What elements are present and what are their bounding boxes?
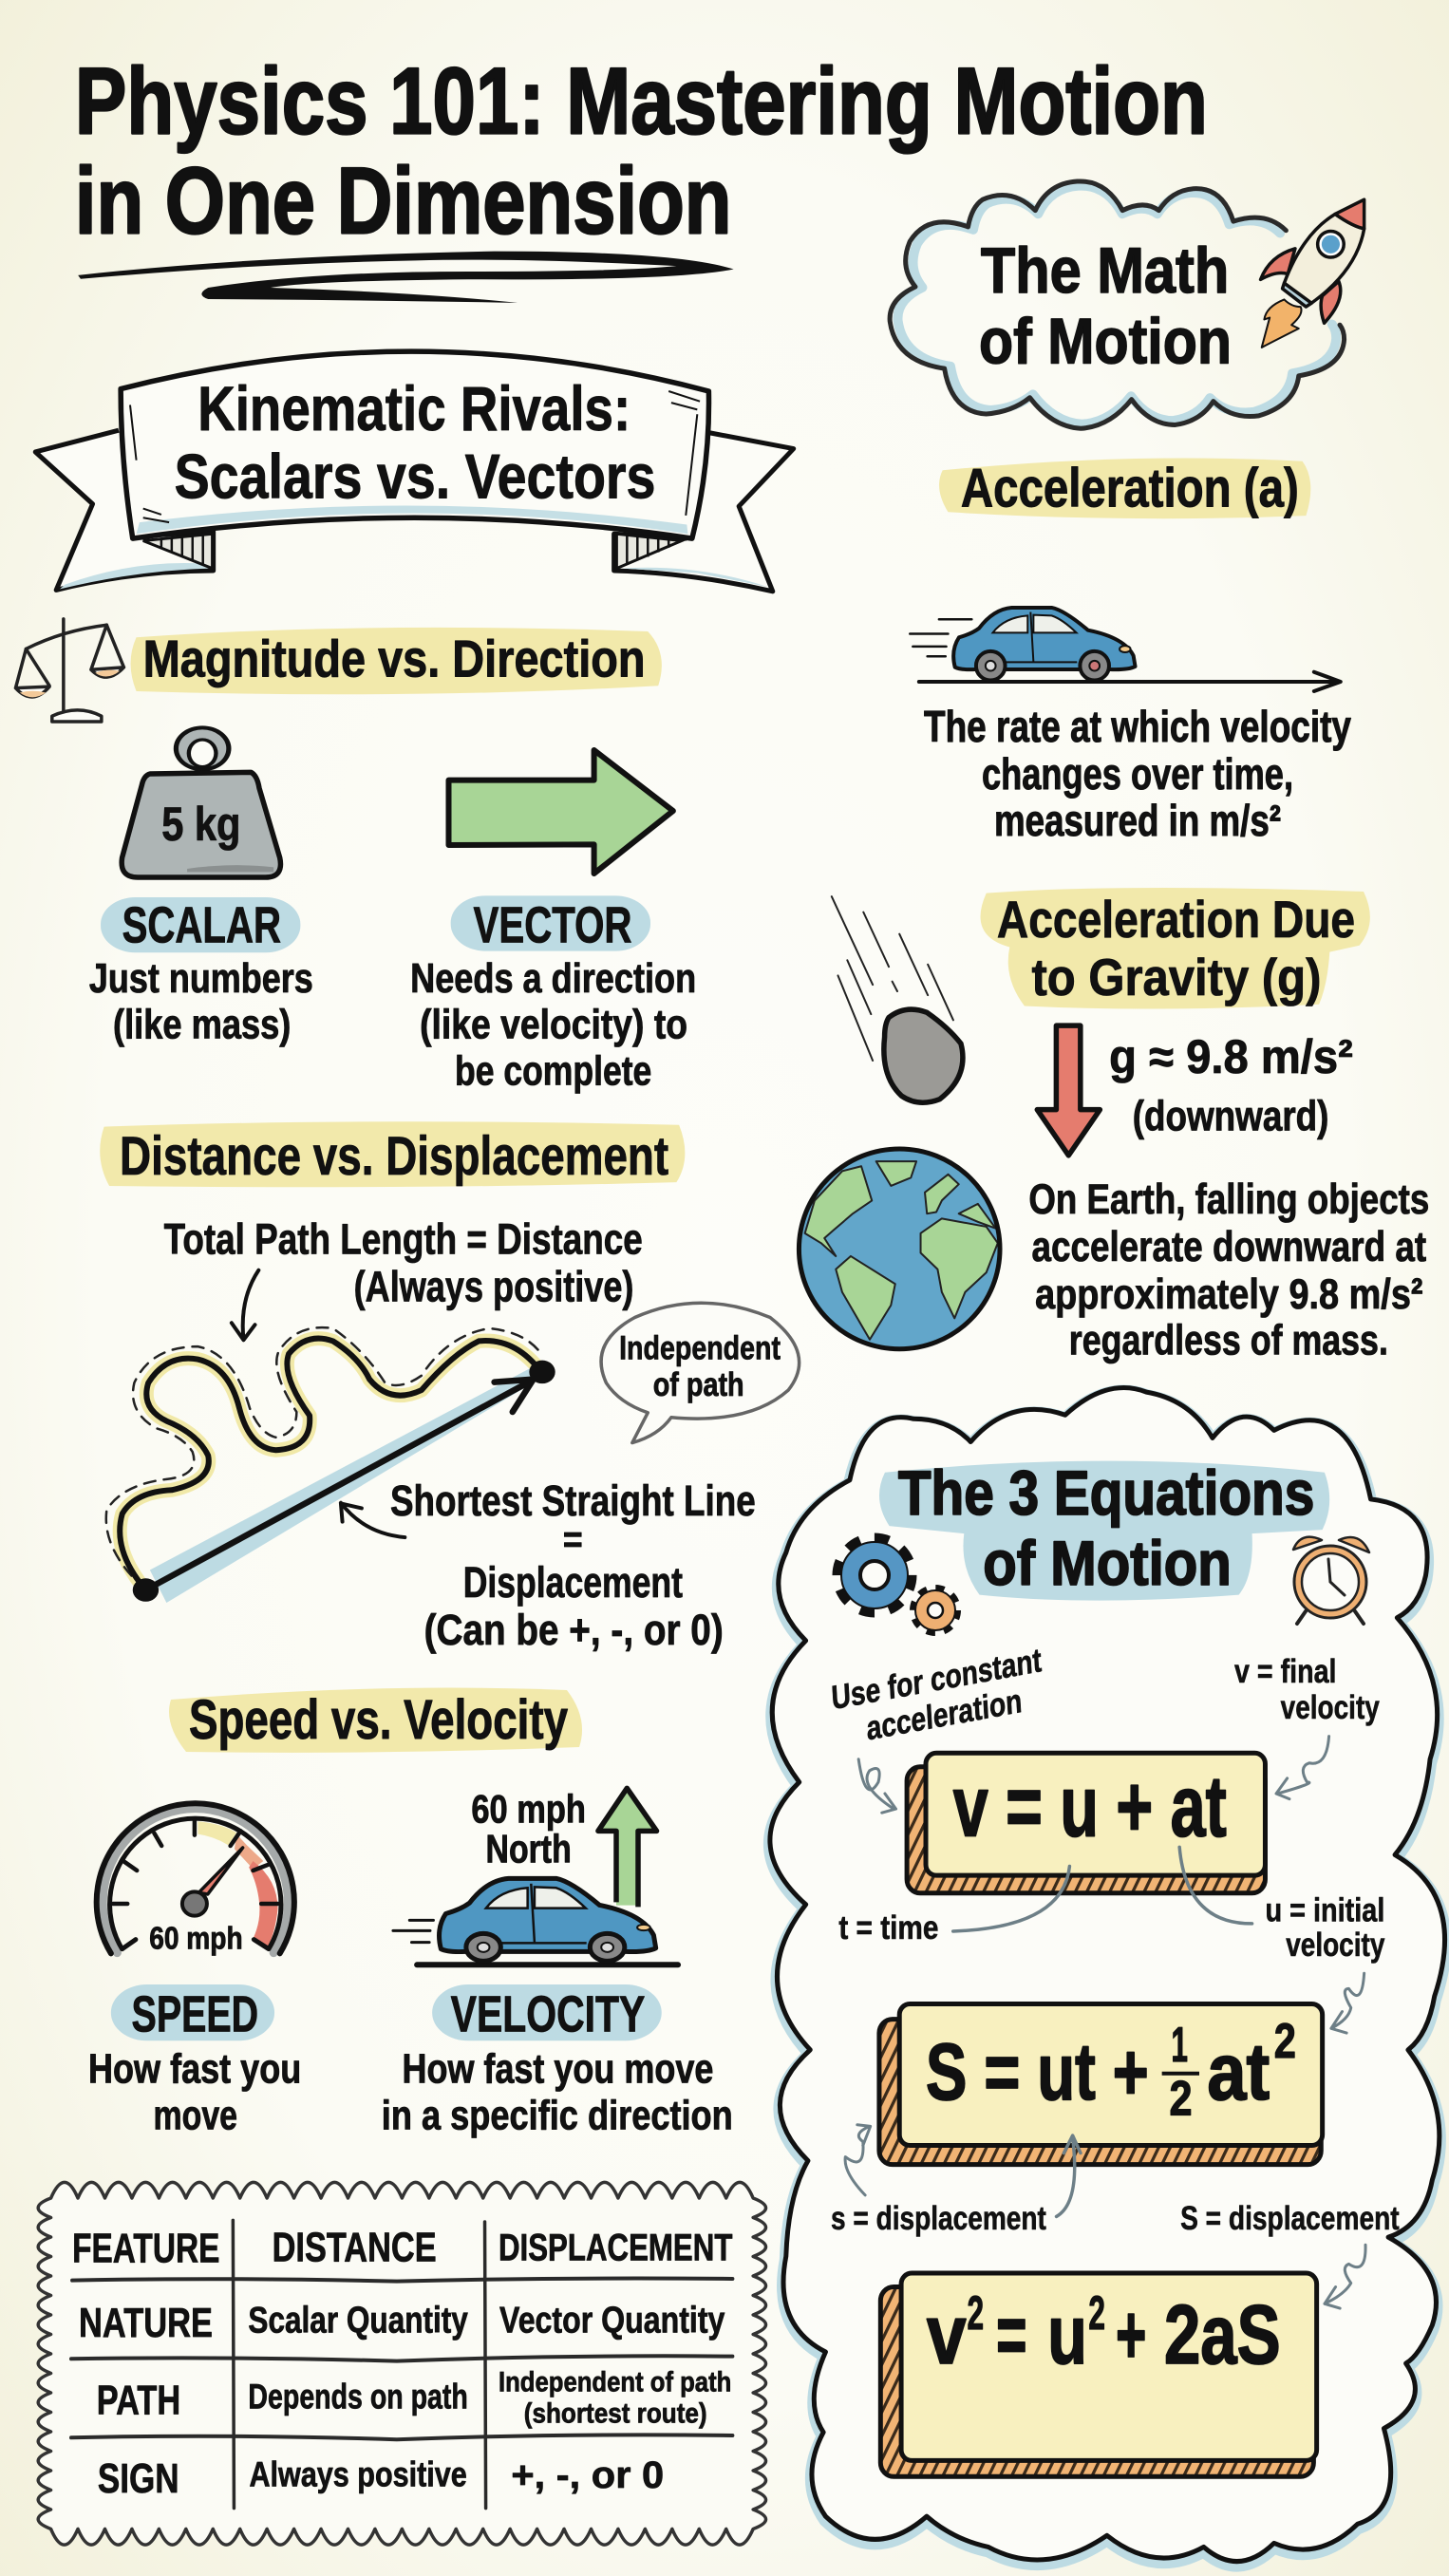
- acceleration description: changes over time,: [982, 749, 1293, 799]
- table header row: FEATURE: [72, 2227, 219, 2271]
- vector description: (like velocity) to: [420, 1001, 687, 1047]
- icon: earth globe: [799, 1149, 1000, 1349]
- heading highlight: [879, 1461, 1329, 1601]
- table row: nature: [79, 2300, 724, 2346]
- velocity description: in a specific direction: [382, 2092, 733, 2138]
- equation 2: S = ut + 1/2 at^2: 2: [1170, 2071, 1193, 2125]
- panel: distance vs displacement: [100, 1121, 800, 1654]
- heading highlight: Acceleration (a): [939, 459, 1310, 518]
- right ribbon tail: [614, 433, 794, 592]
- speed description: move: [154, 2092, 237, 2138]
- equation 2: S = ut + 1/2 at^2: S = ut +: [926, 2027, 1149, 2117]
- panel: the math of motion header: [890, 181, 1364, 691]
- equation 3: v^2 = u^2 + 2aS: [880, 2273, 1317, 2476]
- equation 3: v^2 = u^2 + 2aS: v: [927, 2289, 967, 2382]
- icon: accelerating car with arrow: [910, 608, 1341, 691]
- icon: balance scales: [15, 619, 123, 722]
- gravity value: (downward): [1133, 1092, 1328, 1139]
- distance label: (Always positive): [354, 1263, 633, 1310]
- banner: Kinematic Rivals: [35, 351, 794, 592]
- table header row: DISTANCE: [273, 2226, 437, 2270]
- title: in One Dimension: [75, 149, 731, 254]
- displacement label: =: [563, 1517, 583, 1560]
- equation 1: v = u + at: [907, 1753, 1265, 1893]
- banner face: [121, 351, 709, 538]
- acceleration description: measured in m/s²: [994, 796, 1281, 845]
- banner: Kinematic Rivals: Scalars vs. Vectors: [175, 441, 655, 511]
- note: u = initial velocity: u = initial: [1265, 1892, 1384, 1929]
- vector description: be complete: [455, 1047, 651, 1094]
- displacement label: [390, 1477, 756, 1654]
- scalar label: [101, 897, 300, 954]
- note: u = initial velocity: velocity: [1286, 1927, 1384, 1964]
- connector curves from equation 1: [953, 1847, 1252, 1931]
- 60 mph north label: North: [486, 1828, 572, 1871]
- velocity description: How fast you move: [402, 2045, 713, 2092]
- wavy table border: [38, 2182, 766, 2545]
- scalar label: SCALAR: [122, 897, 281, 954]
- icon: alarm clock: [1293, 1537, 1369, 1624]
- displacement label: (Can be +, -, or 0): [424, 1606, 724, 1654]
- icon: blue car with motion lines: [393, 1878, 656, 1961]
- arrow to path: [232, 1270, 258, 1340]
- equation 3: v^2 = u^2 + 2aS: 2: [1088, 2285, 1105, 2340]
- cloud heading text: [979, 235, 1232, 377]
- note: u = initial velocity: [1265, 1892, 1384, 1964]
- note: S = displacement: S = displacement: [1180, 2200, 1400, 2238]
- title underline stroke: [78, 252, 734, 303]
- speed label: SPEED: [132, 1986, 258, 2042]
- table row: path: [97, 2366, 731, 2429]
- panel: speed vs velocity: [88, 1787, 733, 2138]
- note: v = final velocity: v = final: [1234, 1654, 1336, 1691]
- table row: nature: Vector Quantity: [499, 2300, 724, 2341]
- left ribbon tail: [35, 430, 214, 590]
- icon: 5 kg weight: [122, 725, 280, 877]
- acceleration description: [924, 702, 1351, 845]
- note: v = final velocity: velocity: [1281, 1689, 1380, 1727]
- icon: north arrow: [598, 1788, 657, 1907]
- scalar description: Just numbers: [89, 954, 313, 1001]
- table row: nature: NATURE: [79, 2301, 213, 2346]
- heading: The 3 Equations of Motion: The 3 Equations: [898, 1458, 1314, 1529]
- icon: speedometer: [97, 1803, 294, 1956]
- vector description: Needs a direction: [410, 954, 696, 1001]
- note: s = displacement: s = displacement: [831, 2200, 1046, 2238]
- icon: speedometer: 60 mph: [149, 1921, 243, 1956]
- cloud heading text: of Motion: [979, 305, 1232, 377]
- displacement label: Displacement: [463, 1559, 683, 1607]
- equation 3: v^2 = u^2 + 2aS: 2: [968, 2285, 984, 2340]
- table row: sign: [98, 2454, 664, 2502]
- scalar description: [89, 954, 313, 1047]
- heading: Distance vs. Displacement: Distance vs. Displacement: [120, 1126, 668, 1187]
- icon: green vector arrow: [448, 750, 673, 874]
- connector: s = displacement to equation 2: [1057, 2135, 1081, 2216]
- distance label: [164, 1215, 643, 1310]
- table row: path: PATH: [97, 2379, 180, 2423]
- heading: Acceleration Due to Gravity (g): [997, 890, 1355, 1006]
- speech bubble: independent of path: of path: [653, 1366, 744, 1403]
- note: use for constant acceleration: Use for constant: [831, 1642, 1043, 1718]
- heading: The 3 Equations of Motion: of Motion: [983, 1529, 1232, 1599]
- 60 mph north label: 60 mph: [471, 1787, 586, 1832]
- table row: path: (shortest route): [524, 2397, 707, 2429]
- table row: path: Depends on path: [248, 2379, 468, 2416]
- 60 mph north label: [471, 1787, 586, 1871]
- vector label: [451, 895, 650, 954]
- gravity value: g ≈ 9.8 m/s²: [1109, 1031, 1353, 1083]
- panel: comparison table: DISPLACEMENT: [499, 2228, 733, 2269]
- title: [75, 49, 1208, 254]
- table row: sign: SIGN: [98, 2456, 179, 2502]
- scalar description: (like mass): [113, 1001, 291, 1047]
- equation 3: v^2 = u^2 + 2aS: 2aS: [1164, 2289, 1281, 2382]
- heading highlight: [100, 1121, 685, 1187]
- displacement label: Shortest Straight Line: [390, 1477, 756, 1525]
- table row: path: Independent of path: [499, 2366, 731, 2397]
- icon: falling meteor: [832, 896, 963, 1102]
- gravity value: [1109, 1031, 1353, 1139]
- velocity description: [382, 2045, 733, 2138]
- banner text: Kinematic Rivals:: [198, 373, 630, 443]
- vector description: [410, 954, 696, 1094]
- velocity label: [432, 1984, 662, 2042]
- icon: red gravity arrow: [1037, 1025, 1100, 1156]
- speed description: [88, 2045, 301, 2138]
- note: use for constant acceleration: [831, 1642, 1043, 1748]
- distance label: Total Path Length = Distance: [164, 1215, 643, 1263]
- panel: acceleration due to gravity: [799, 888, 1429, 1363]
- note: v = final velocity: [1234, 1654, 1380, 1727]
- scalloped panel outline: [770, 1388, 1445, 2566]
- vector label: VECTOR: [474, 897, 631, 954]
- equation 2: S = ut + 1/2 at^2: [879, 2004, 1323, 2165]
- speech bubble: independent of path: Independent: [619, 1330, 781, 1367]
- equation 3: v^2 = u^2 + 2aS: u: [1047, 2289, 1087, 2382]
- winding distance path: [106, 1327, 541, 1590]
- icon: rocket: [1261, 199, 1364, 348]
- equation 1: v = u + at: v = u + at: [953, 1758, 1227, 1854]
- table row: sign: Always positive: [249, 2455, 467, 2494]
- equation 3: v^2 = u^2 + 2aS: =: [996, 2289, 1027, 2382]
- displacement arrow: [133, 1361, 555, 1603]
- heading: Magnitude vs. Direction: Magnitude vs. Direction: [143, 631, 646, 688]
- speed description: How fast you: [88, 2045, 301, 2092]
- heading: Acceleration (a): Acceleration (a): [961, 459, 1299, 519]
- note: t = time: t = time: [838, 1909, 938, 1947]
- curly arrows: [845, 1737, 1365, 2308]
- table row: sign: +, -, or 0: [511, 2454, 664, 2496]
- cloud heading text: The Math: [981, 235, 1229, 307]
- note: use for constant acceleration: acceleration: [866, 1683, 1023, 1748]
- equation 3: v^2 = u^2 + 2aS: +: [1116, 2289, 1146, 2382]
- icon: gears: [839, 1540, 956, 1631]
- equation 2: S = ut + 1/2 at^2: 1: [1171, 2017, 1188, 2072]
- speed label: [111, 1984, 274, 2042]
- heading highlight: [981, 888, 1370, 1009]
- table header row: [72, 2226, 733, 2271]
- speech bubble: independent of path: [601, 1303, 800, 1443]
- heading highlight: Speed vs. Velocity: [169, 1688, 582, 1753]
- heading highlight: Magnitude vs. Direction: [131, 628, 662, 694]
- heading: The 3 Equations of Motion: [898, 1458, 1314, 1599]
- panel: scalar vs vector: [89, 725, 696, 1094]
- acceleration description: The rate at which velocity: [924, 702, 1351, 751]
- gravity description: [1028, 1175, 1429, 1363]
- velocity label: VELOCITY: [451, 1986, 645, 2042]
- equation 2: S = ut + 1/2 at^2: 2: [1274, 2013, 1296, 2068]
- arrow to displacement: [341, 1503, 405, 1537]
- table row: nature: Scalar Quantity: [248, 2300, 468, 2341]
- heading: Acceleration Due to Gravity (g): to Gravity (g): [1032, 948, 1321, 1006]
- panel: the 3 equations of motion: [770, 1388, 1445, 2566]
- icon: 5 kg weight: 5 kg: [161, 798, 240, 851]
- heading: Speed vs. Velocity: Speed vs. Velocity: [189, 1689, 568, 1751]
- ground line: [417, 1962, 678, 1967]
- panel: comparison table: [38, 2182, 766, 2545]
- equation 2: S = ut + 1/2 at^2: at: [1207, 2027, 1270, 2117]
- cloud outline: [890, 181, 1345, 428]
